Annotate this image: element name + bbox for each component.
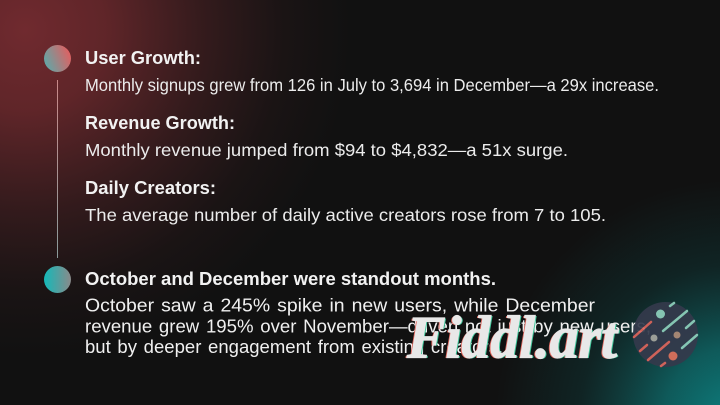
heading: standout months: October and December were standout months. [85,269,496,289]
paragraph: standout months detail: October saw a 245% spike in new users, while December [85,296,595,316]
heading: revenue growth: Revenue Growth: [85,113,235,133]
watermark: wordmark: Fiddl.art [408,305,621,371]
paragraph: standout months detail [85,296,651,357]
paragraph: standout months detail: revenue grew 195% over November—driven not just by new users, [85,316,651,336]
timeline: bottom marker [44,266,71,293]
watermark: wordmark: Fiddl.art [405,305,618,371]
heading: daily creators: Daily Creators: [85,178,216,198]
text: user growth detail: Monthly signups grew from 126 in July to 3,694 in December—a 29x increase. [85,75,659,95]
heading: user growth: User Growth: [85,48,201,68]
block: daily creators [85,178,606,225]
text: daily creators detail: The average number of daily active creators rose from 7 to 105. [85,205,606,225]
text: revenue growth detail: Monthly revenue jumped from $94 to $4,832—a 51x surge. [85,140,568,160]
watermark: wordmark: Fiddl.art [406,304,619,370]
block: standout months [85,269,651,357]
timeline: connector line [57,80,58,258]
watermark: logo icon [633,302,698,367]
block: user growth [85,48,659,95]
timeline: top marker [44,45,71,72]
block: revenue growth [85,113,568,160]
paragraph: standout months detail: but by deeper engagement from existing creators. [85,337,503,357]
